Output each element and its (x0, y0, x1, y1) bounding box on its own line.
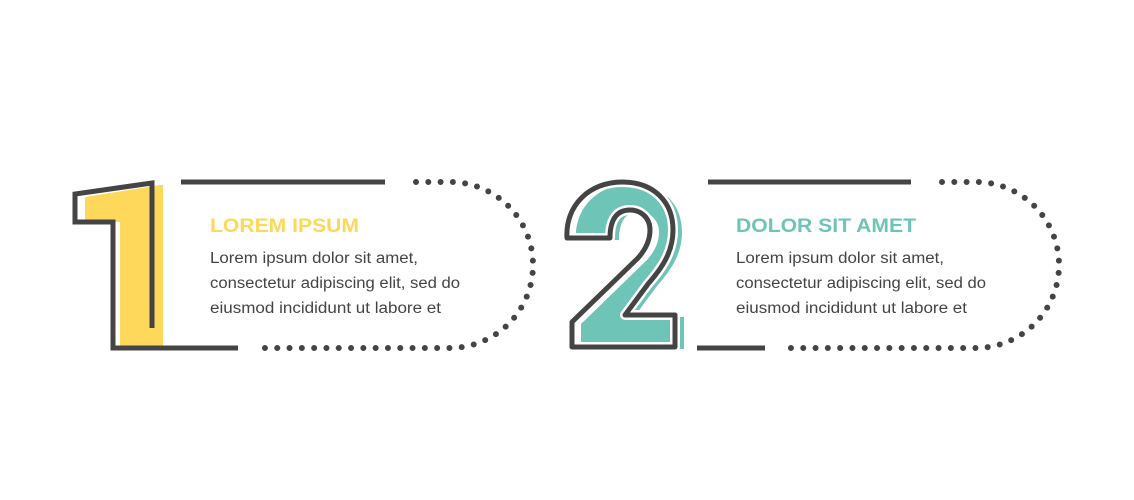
text block: step 2 (736, 250, 986, 317)
icon: number 1 (75, 183, 238, 348)
text block: step 2: Lorem ipsum dolor sit amet, (736, 250, 944, 267)
text block: step 2: eiusmod incididunt ut labore et (736, 300, 968, 317)
frame: step 2 (697, 182, 1059, 348)
text block: step 1: consectetur adipiscing elit, sed do (210, 275, 460, 292)
heading: step 1: LOREM IPSUM (210, 216, 359, 237)
step 2 group (567, 182, 1059, 349)
text block: step 2: consectetur adipiscing elit, sed do (736, 275, 986, 292)
text block: step 1 (210, 250, 460, 317)
heading: step 2: DOLOR SIT AMET (736, 216, 916, 237)
step 1 group (75, 182, 533, 348)
frame: step 1 (181, 182, 533, 348)
icon: number 2 (567, 182, 684, 349)
text block: step 1: eiusmod incididunt ut labore et (210, 300, 442, 317)
text block: step 1: Lorem ipsum dolor sit amet, (210, 250, 418, 267)
